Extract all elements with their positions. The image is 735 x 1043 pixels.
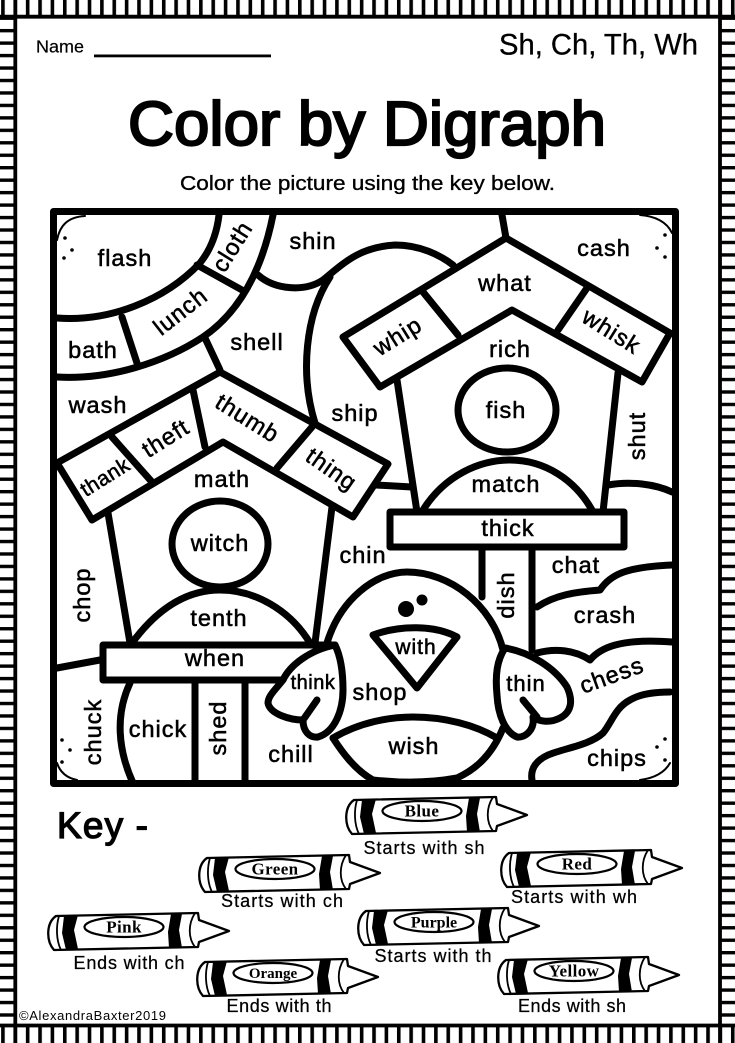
digraph word labels: crash	[574, 602, 636, 628]
caption: blue: Starts with sh	[364, 838, 484, 858]
digraph word labels: cash	[577, 235, 631, 261]
caption: green: Starts with ch	[221, 891, 343, 911]
digraph word labels: shell	[230, 329, 284, 355]
left wing	[268, 645, 343, 737]
digraph word labels: chill	[268, 741, 314, 767]
bird	[327, 572, 503, 782]
digraph word labels: thank	[76, 453, 134, 501]
caption: yellow: Ends with sh	[518, 996, 626, 1016]
digraph word labels: flash	[98, 245, 152, 271]
copyright: ©AlexandraBaxter2019	[19, 1008, 166, 1023]
digraph word labels: thing	[301, 442, 362, 496]
title: Color by Digraph	[128, 90, 606, 159]
crayon: yellow	[498, 957, 679, 994]
digraph word labels: thin	[506, 671, 546, 696]
caption: red: Starts with wh	[511, 887, 637, 907]
left birdhouse	[57, 372, 388, 643]
crayon: yellow: Yellow	[549, 962, 600, 980]
panel: coloring picture	[54, 212, 676, 784]
digraph word labels: wash	[68, 392, 127, 418]
digraph word labels: whip	[368, 311, 427, 362]
digraph word labels: witch	[190, 530, 249, 556]
digraph word labels: match	[472, 471, 540, 497]
digraph word labels: thick	[481, 515, 535, 541]
digraph word labels: dish	[493, 571, 519, 619]
digraph word labels: chin	[339, 542, 387, 568]
left birdhouse perch and post	[103, 645, 335, 783]
digraph word labels: thumb	[211, 388, 284, 448]
digraph word labels: chess	[576, 651, 647, 699]
right birdhouse	[343, 238, 670, 650]
digraph word labels	[68, 216, 650, 771]
digraph word labels: fish	[486, 397, 526, 423]
crayon: orange: Orange	[249, 966, 298, 982]
crayon: orange	[197, 959, 378, 996]
crayon: red: Red	[562, 854, 592, 874]
bird eyes	[398, 594, 428, 617]
digraph word labels: rich	[489, 336, 531, 362]
digraph word labels: bath	[68, 337, 118, 363]
digraph word labels: tenth	[190, 605, 248, 631]
digraph word labels: when	[184, 645, 245, 671]
caption: orange: Ends with th	[226, 996, 332, 1016]
digraph word labels: with	[394, 636, 437, 659]
digraph word labels: cloth	[207, 216, 258, 277]
digraph word labels: theft	[137, 414, 194, 463]
top-left rainbow arcs	[57, 215, 273, 377]
key heading: Key -	[57, 805, 148, 846]
digraph word labels: shut	[624, 412, 650, 460]
digraph word labels: wish	[387, 733, 440, 759]
name field: Name	[36, 36, 84, 56]
crayon: pink: Pink	[106, 918, 142, 936]
digraph word labels: chuck	[80, 699, 106, 765]
panel: crayon key	[48, 797, 682, 1016]
background curves and tall hill	[57, 215, 672, 668]
crayon: red	[501, 850, 682, 887]
caption: pink: Ends with ch	[74, 953, 184, 973]
digraph word labels: ship	[331, 400, 379, 426]
digraph word labels: whisk	[577, 303, 645, 359]
digraph word labels: chips	[587, 745, 647, 771]
instructions: Color the picture using the key below.	[180, 173, 555, 195]
crayon: pink	[48, 913, 229, 950]
crayon: blue	[346, 797, 527, 834]
crayon: purple: Purple	[411, 914, 457, 932]
caption: purple: Starts with th	[374, 946, 492, 966]
digraph word labels: math	[194, 466, 250, 492]
digraph word labels: chick	[129, 716, 187, 742]
right hills	[532, 565, 672, 780]
digraph word labels: shin	[289, 228, 337, 254]
right wing	[496, 648, 571, 737]
crayon: green: Green	[251, 860, 299, 878]
picture frame	[54, 212, 676, 784]
digraph list heading: Sh, Ch, Th, Wh	[499, 28, 698, 62]
crayon: green	[199, 855, 380, 892]
digraph word labels: chat	[552, 552, 600, 578]
corner sun rays	[57, 215, 672, 780]
digraph word labels: lunch	[148, 282, 212, 340]
crayon: purple	[358, 908, 539, 945]
digraph word labels: shop	[353, 679, 407, 705]
digraph word labels: think	[291, 672, 336, 694]
digraph word labels: what	[477, 270, 532, 296]
digraph word labels: chop	[69, 568, 95, 622]
digraph word labels: shed	[205, 701, 231, 755]
crayon: blue: Blue	[405, 802, 439, 820]
